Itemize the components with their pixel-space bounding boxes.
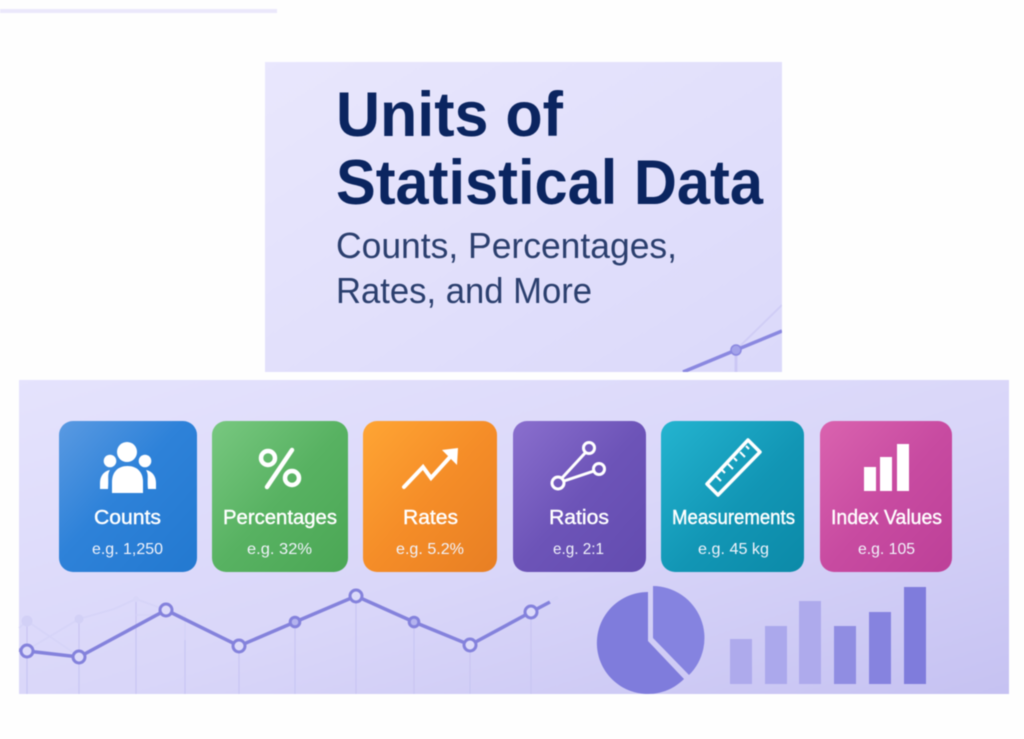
- subtitle: [336, 225, 677, 311]
- card: Rates: [363, 421, 497, 572]
- title: Units of Statistical Data: Units of: [336, 80, 564, 150]
- card: Counts: [59, 421, 197, 572]
- card: Index Values: [820, 421, 952, 572]
- icon: ratio nodes: [552, 442, 604, 489]
- card: Counts: Counts: [94, 507, 161, 529]
- decorative corner line chart: [683, 305, 782, 372]
- bar chart: [730, 587, 926, 684]
- card: Counts: e.g. 1,250: [92, 541, 163, 558]
- pie chart: [597, 586, 704, 694]
- line chart: [19, 590, 558, 694]
- card: Ratios: Ratios: [549, 507, 609, 529]
- card: Measurements: e.g. 45 kg: [698, 541, 769, 558]
- card: Percentages: [212, 421, 348, 572]
- card: Ratios: [513, 421, 646, 572]
- icon: ruler: [707, 440, 760, 495]
- icon: bars: [864, 444, 909, 491]
- card: Index Values: e.g. 105: [858, 541, 915, 558]
- panel: title: [265, 62, 782, 372]
- subtitle: Rates, and More: [336, 270, 592, 311]
- card: Index Values: Index Values: [831, 507, 942, 529]
- card: Ratios: e.g. 2:1: [553, 541, 604, 558]
- card: Measurements: Measurements: [672, 507, 795, 529]
- card: Measurements: [661, 421, 804, 572]
- panel: unit types and charts: [19, 380, 1009, 694]
- icon: rising arrow: [404, 448, 458, 487]
- top accent strip: [0, 9, 277, 13]
- card: Percentages: Percentages: [223, 507, 337, 529]
- card: Rates: Rates: [403, 507, 458, 529]
- card: Rates: e.g. 5.2%: [396, 541, 464, 558]
- icon: percent: [261, 450, 299, 487]
- title: Units of Statistical Data: [336, 80, 764, 218]
- subtitle: Counts, Percentages,: [336, 225, 677, 266]
- card: Percentages: e.g. 32%: [247, 541, 312, 558]
- title: Units of Statistical Data: Statistical Data: [336, 148, 764, 218]
- icon: people: [100, 442, 156, 493]
